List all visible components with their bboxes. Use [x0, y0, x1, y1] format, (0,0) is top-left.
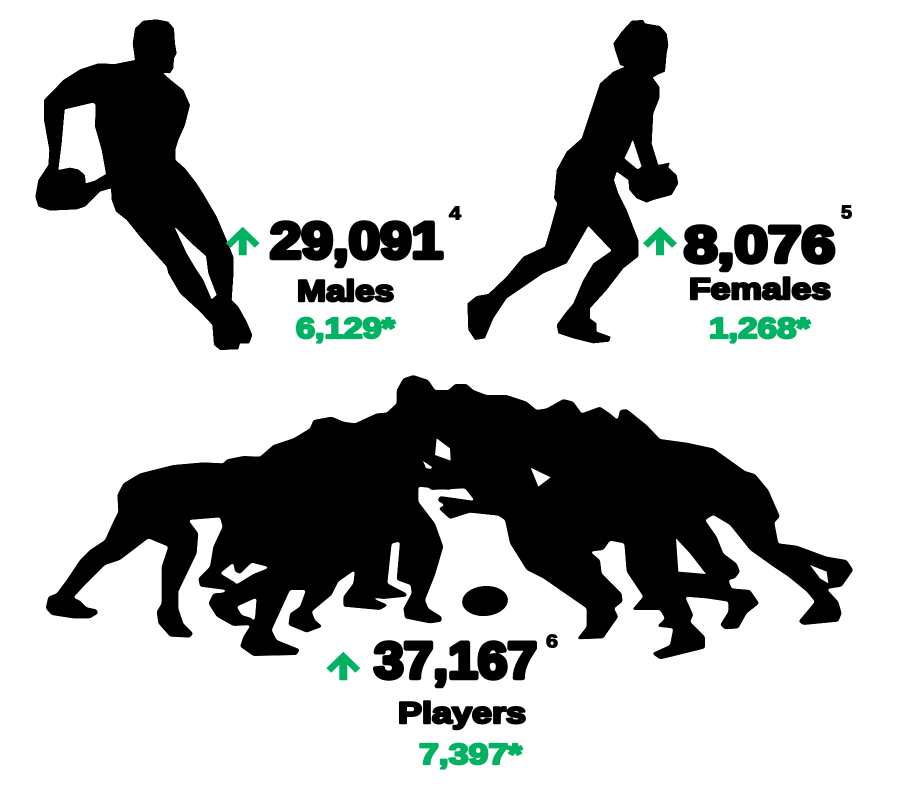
stat: 37,167: 37,167: [374, 632, 537, 689]
icon: green up arrow females: [643, 227, 677, 255]
stat: 7,397*: 7,397*: [419, 739, 523, 771]
icon: male rugby player silhouette: [35, 19, 252, 350]
footnote marker 5: 5: [841, 202, 852, 222]
stat: 1,268*: 1,268*: [709, 313, 811, 345]
stat: 8,076: 8,076: [684, 216, 835, 273]
footnote marker 6: 6: [546, 632, 558, 652]
label: Males: Males: [297, 275, 394, 308]
icon: female rugby player silhouette: [467, 20, 678, 343]
label: Females: Females: [689, 273, 831, 306]
stat: 29,091: 29,091: [270, 212, 443, 269]
stat: 6,129*: 6,129*: [296, 313, 396, 345]
icon: rugby ball: [461, 584, 509, 618]
icon: green up arrow males: [226, 227, 260, 255]
icon: rugby scrum silhouette: [46, 375, 853, 659]
footnote marker 4: 4: [449, 204, 461, 224]
icon: green up arrow players: [326, 652, 360, 680]
label: Players: Players: [398, 697, 526, 730]
